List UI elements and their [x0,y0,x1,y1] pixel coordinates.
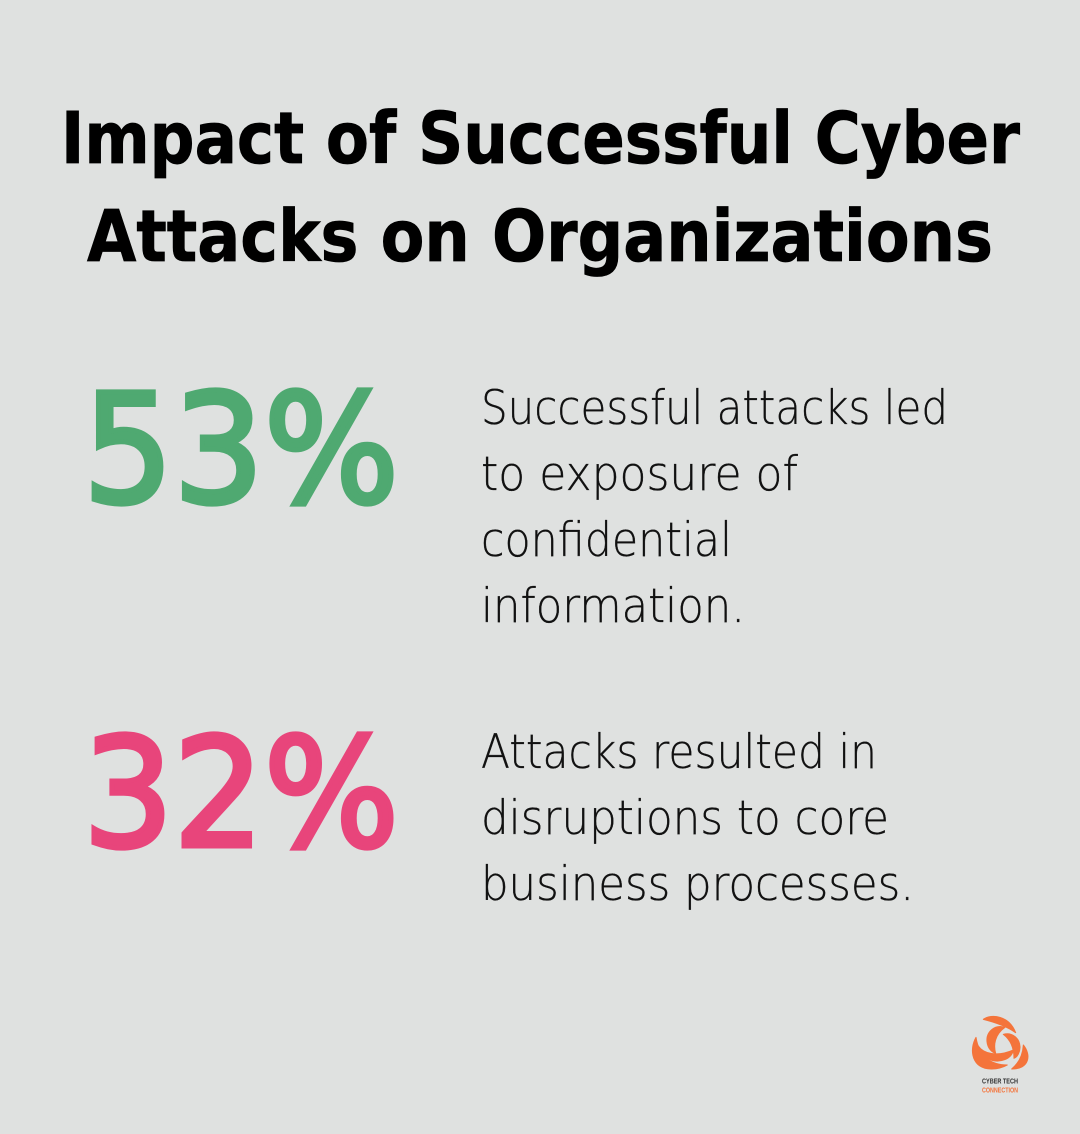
description: 53%: confidential [481,513,732,568]
description: 32%: business processes. [481,857,914,912]
description: 53% [481,381,948,634]
logo text: CYBER TECH [982,1076,1018,1086]
description: 53%: Successful attacks led [481,381,948,436]
logo: Cyber Tech Connection [972,1016,1028,1094]
title: Attacks on Organizations [87,195,993,278]
description: 32%: Attacks resulted in [481,725,877,780]
description: 32%: disruptions to core [481,791,889,846]
title [61,97,1020,278]
stat: 32%: 32% [83,706,399,882]
description: 53%: information. [481,579,745,634]
icon: swirl mark [972,1016,1028,1069]
logo: Cyber Tech Connection: CONNECTION [982,1086,1018,1094]
description: 53%: to exposure of [481,447,798,502]
description: 32% [481,725,914,912]
stat: 53%: 53% [83,362,399,538]
